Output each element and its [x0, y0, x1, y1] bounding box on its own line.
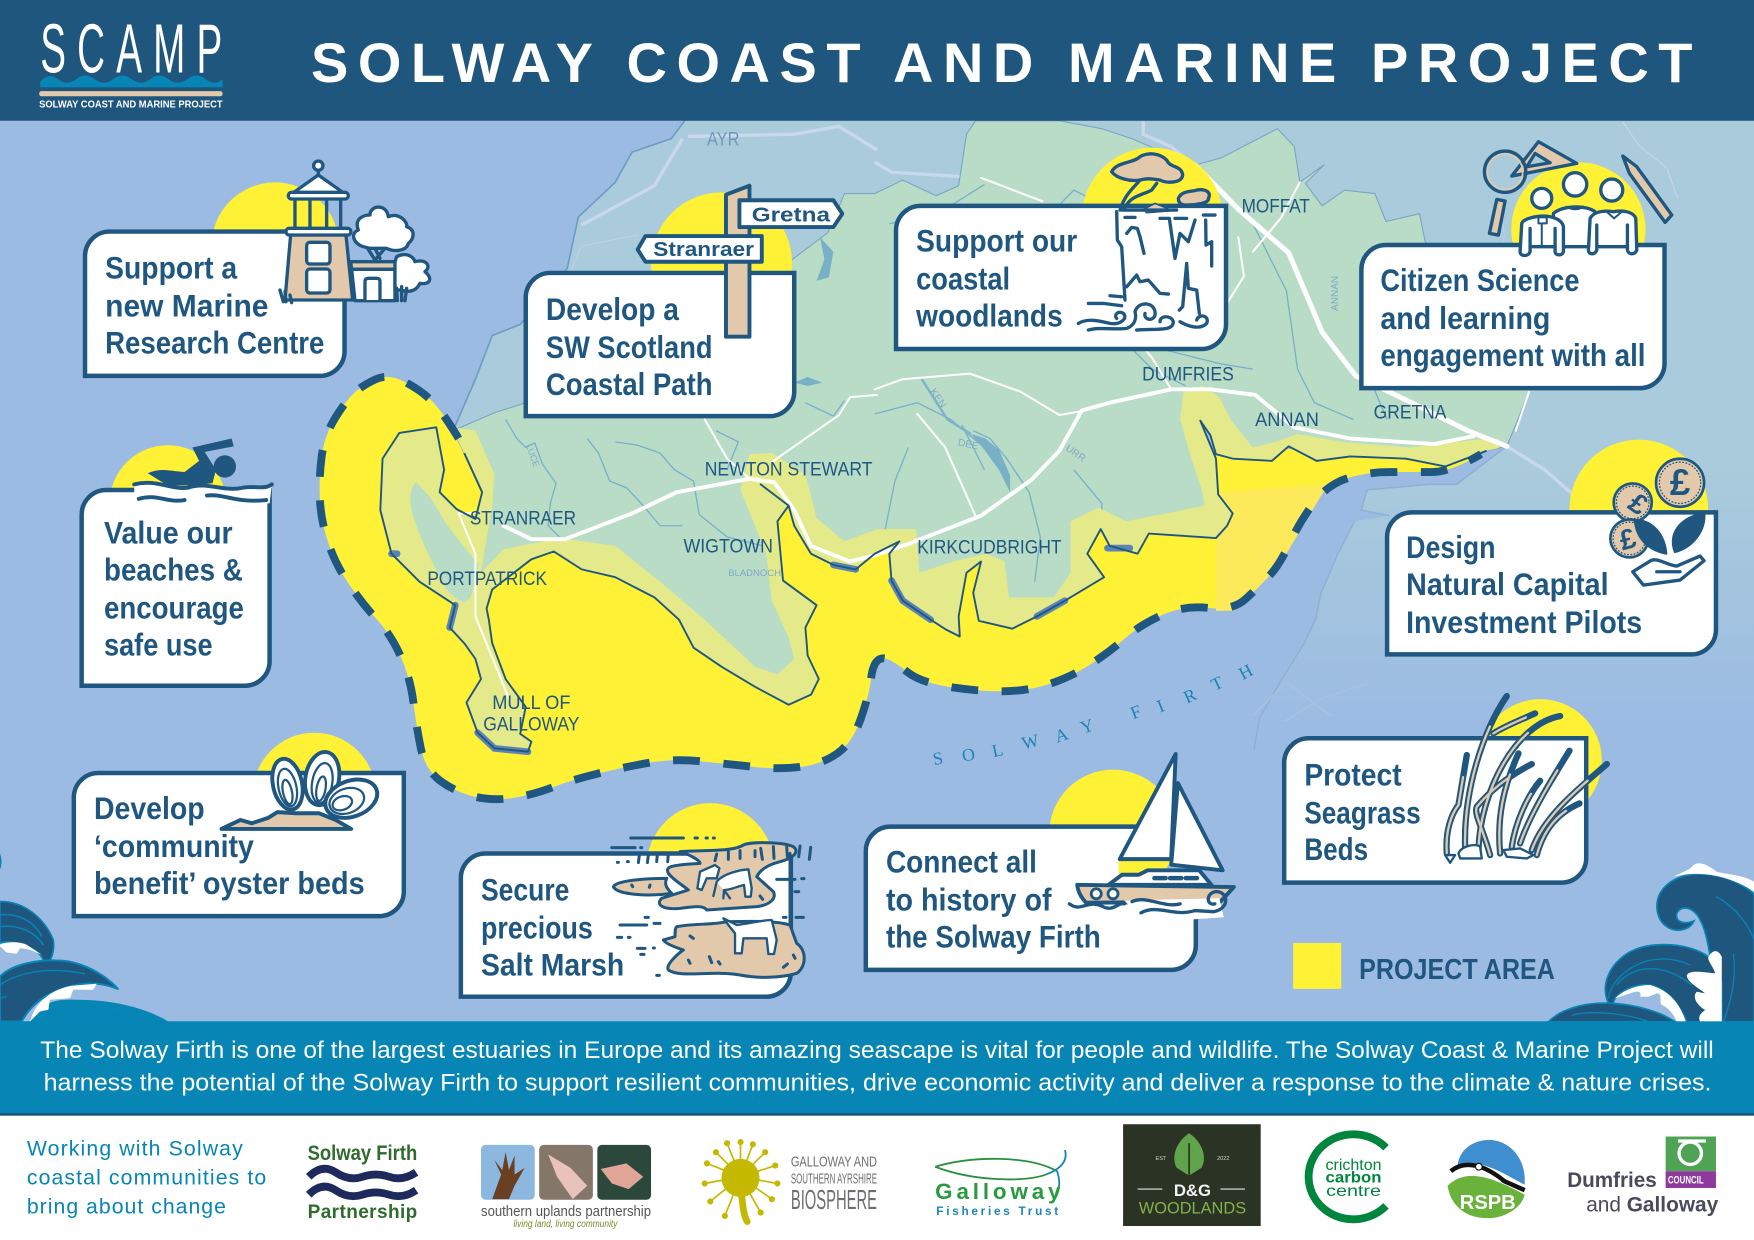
logo: Dumfries and Galloway Council: Dumfries	[1567, 1168, 1657, 1192]
callout: oyster beds: Develop	[94, 791, 205, 826]
icon: coins and plant in hand: £	[1622, 487, 1654, 522]
logo: Galloway Fisheries Trust: Fisheries Trust	[936, 1205, 1058, 1218]
map: place names: DUMFRIES	[1142, 364, 1234, 385]
map: place names: PORTPATRICK	[427, 569, 547, 590]
callout: oyster beds	[74, 733, 404, 916]
logo: Galloway and Southern Ayrshire Biosphere: BIOSPHERE	[791, 1184, 877, 1215]
logo: D&G Woodlands: 2022	[1217, 1156, 1229, 1162]
callout: coastal path: Coastal Path	[546, 367, 713, 402]
icon: lighthouse	[280, 161, 430, 303]
logo: D&G Woodlands: WOODLANDS	[1139, 1199, 1246, 1218]
callout: coastal woodlands: woodlands	[915, 299, 1063, 334]
callout: seagrass: Seagrass	[1304, 795, 1421, 830]
callout: beaches	[82, 439, 272, 686]
decoration: left waves	[0, 854, 168, 1021]
callout: marine research centre: new Marine	[105, 289, 268, 324]
icon: boats	[1069, 754, 1234, 920]
map: place names: ANNAN	[1330, 276, 1341, 311]
callout: citizen science: and learning	[1380, 301, 1550, 336]
logo: Crichton Carbon Centre: centre	[1326, 1183, 1381, 1200]
footer strapline: Working with Solway	[27, 1137, 243, 1161]
icon: coins and plant in hand: £	[1670, 462, 1691, 503]
map: pale coastal land band	[369, 386, 1499, 772]
map: dashed project boundary	[320, 377, 1481, 799]
callout: marine research centre: Support a	[105, 251, 238, 286]
logo: Solway Firth Partnership	[308, 1141, 417, 1223]
callout: coastal woodlands: coastal	[916, 262, 1010, 297]
logo: D&G Woodlands: EST	[1156, 1156, 1167, 1162]
map: place names: NEWTON STEWART	[705, 459, 873, 480]
logo: Crichton Carbon Centre: crichton	[1326, 1157, 1381, 1174]
logo: Dumfries and Galloway Council: and Galloway	[1586, 1192, 1718, 1216]
map: place names: LUCE	[524, 442, 541, 468]
logo: Southern Uplands Partnership: southern uplands partnership	[481, 1204, 651, 1220]
icon: coins and plant in hand	[1610, 459, 1704, 585]
logo: D&G Woodlands: D&G	[1174, 1181, 1211, 1200]
map: surrounding land	[453, 121, 1754, 783]
icon: signpost: Stranraer	[653, 239, 754, 261]
map: place names: KEN	[927, 387, 948, 410]
callout: natural capital: Natural Capital	[1406, 567, 1609, 602]
map: place names: MOFFAT	[1242, 197, 1310, 218]
callout: natural capital: Investment Pilots	[1406, 605, 1642, 640]
map: place names: MULL OF	[492, 693, 570, 714]
callout: history of the firth: Connect all	[886, 845, 1037, 880]
callout: salt marsh: Salt Marsh	[481, 947, 624, 982]
callout: natural capital	[1387, 440, 1716, 654]
logo: RSPB	[1447, 1140, 1525, 1218]
logo: RSPB: RSPB	[1460, 1192, 1516, 1214]
callout: marine research centre: Research Centre	[105, 325, 324, 360]
map: place names: GRETNA	[1374, 402, 1447, 423]
logo: Dumfries and Galloway Council: COUNCIL	[1668, 1175, 1704, 1187]
map: place names: STRANRAER	[470, 509, 576, 530]
map: place names: BLADNOCH	[728, 568, 781, 579]
icon: cliff with trees	[1078, 154, 1215, 330]
footer strapline: coastal communities to	[27, 1166, 266, 1190]
map: place names: URR	[1063, 443, 1087, 465]
callout: citizen science	[1361, 142, 1672, 388]
callout: coastal path: Develop a	[546, 292, 680, 327]
callout: natural capital: Design	[1406, 530, 1496, 565]
callout: coastal path	[526, 186, 842, 416]
callout: coastal woodlands: Support our	[916, 224, 1077, 259]
icon: coins and plant in hand: £	[1616, 522, 1640, 557]
logo: Dumfries and Galloway Council	[1567, 1137, 1718, 1216]
icon: seagrass	[1445, 696, 1607, 863]
callout: beaches: safe use	[104, 628, 213, 663]
callout: marine research centre	[85, 161, 430, 376]
callout: beaches: encourage	[104, 591, 244, 626]
icon: oysters on a rock	[221, 749, 383, 829]
intro text band	[0, 1021, 1754, 1116]
map: project area yellow zone	[320, 377, 1481, 799]
callout: salt marsh: precious	[481, 911, 593, 946]
callout: beaches: Value our	[104, 516, 233, 551]
callout: beaches: beaches &	[104, 553, 243, 588]
map: place names: GALLOWAY	[483, 714, 580, 735]
map: place names: WIGTOWN	[683, 537, 773, 558]
footer strapline	[27, 1137, 266, 1219]
logo: Crichton Carbon Centre	[1309, 1134, 1386, 1219]
logo: Solway Firth Partnership: Partnership	[308, 1202, 417, 1223]
sea background	[0, 121, 1754, 1022]
legend: project area: PROJECT AREA	[1359, 954, 1555, 986]
callout: coastal path: SW Scotland	[546, 330, 713, 365]
logo: D&G Woodlands	[1123, 1124, 1261, 1226]
callout: history of the firth: to history of	[886, 883, 1052, 918]
callout: oyster beds: ‘community	[94, 829, 254, 864]
footer strapline: bring about change	[27, 1195, 226, 1219]
callout: seagrass	[1284, 696, 1607, 883]
logo: Southern Uplands Partnership: living land, living community	[513, 1219, 618, 1230]
map: place names	[427, 129, 1447, 735]
map: lochs and river Dee	[794, 237, 1010, 492]
callout: oyster beds: benefit’ oyster beds	[94, 866, 365, 901]
logo: Galloway and Southern Ayrshire Biosphere: SOUTHERN AYRSHIRE	[791, 1172, 877, 1188]
map: rivers	[506, 185, 1387, 582]
map label: Solway Firth: SOLWAY FIRTH	[931, 660, 1256, 769]
icon: people with science tools	[1484, 142, 1672, 255]
logo: Galloway and Southern Ayrshire Biosphere: GALLOWAY AND	[791, 1155, 877, 1171]
logo: Southern Uplands Partnership	[481, 1145, 651, 1230]
callout: coastal woodlands	[896, 148, 1226, 349]
header bar	[0, 0, 1754, 121]
callout: history of the firth	[866, 754, 1234, 970]
logo: Solway Firth Partnership: Solway Firth	[308, 1141, 417, 1165]
callout: salt marsh: Secure	[481, 872, 569, 907]
title: SOLWAY COAST AND MARINE PROJECT	[311, 31, 1692, 94]
map: paler shading over the eastern firth	[1216, 484, 1328, 611]
icon: signpost	[638, 186, 842, 337]
map: mudflats	[392, 548, 1130, 752]
footer	[0, 1116, 1754, 1240]
intro text band: The Solway Firth is one of the largest estuaries in Europe and its amazing seascape is vital for people and wildlife. The Solway Coast & Marine Project will	[40, 1037, 1714, 1064]
icon: swimmer	[134, 439, 272, 503]
logo: SCAMP: SCAMP	[40, 10, 222, 88]
callout: history of the firth: the Solway Firth	[886, 919, 1101, 954]
logo: Galloway and Southern Ayrshire Biosphere	[702, 1140, 877, 1222]
callout: salt marsh	[461, 803, 811, 997]
callout: seagrass: Beds	[1304, 832, 1368, 867]
legend: project area	[1293, 943, 1555, 989]
logo: Galloway Fisheries Trust: Galloway	[935, 1179, 1061, 1204]
map: roads	[459, 166, 1529, 699]
map: place names: DEE	[957, 437, 980, 453]
logo: Galloway Fisheries Trust	[935, 1150, 1066, 1218]
logo: SCAMP: SOLWAY COAST AND MARINE PROJECT	[39, 99, 223, 110]
map: coastline	[380, 421, 1487, 752]
icon: signpost: Gretna	[752, 204, 831, 226]
callout: citizen science: engagement with all	[1380, 338, 1645, 373]
decoration: right waves	[1548, 863, 1754, 1022]
map: place names: ANNAN	[1255, 410, 1319, 431]
intro text band: harness the potential of the Solway Firth to support resilient communities, drive economic activity and deliver a response to the climate & nature crises.	[44, 1070, 1711, 1097]
map: place names: AYR	[707, 129, 739, 150]
callout: seagrass: Protect	[1304, 757, 1402, 792]
logo: Crichton Carbon Centre: carbon	[1326, 1169, 1381, 1186]
icon: salt marsh with cattle	[612, 838, 811, 977]
map: place names: KIRKCUDBRIGHT	[917, 538, 1062, 559]
map: Galloway and Dumfries land	[380, 121, 1529, 752]
callout: citizen science: Citizen Science	[1380, 263, 1579, 298]
